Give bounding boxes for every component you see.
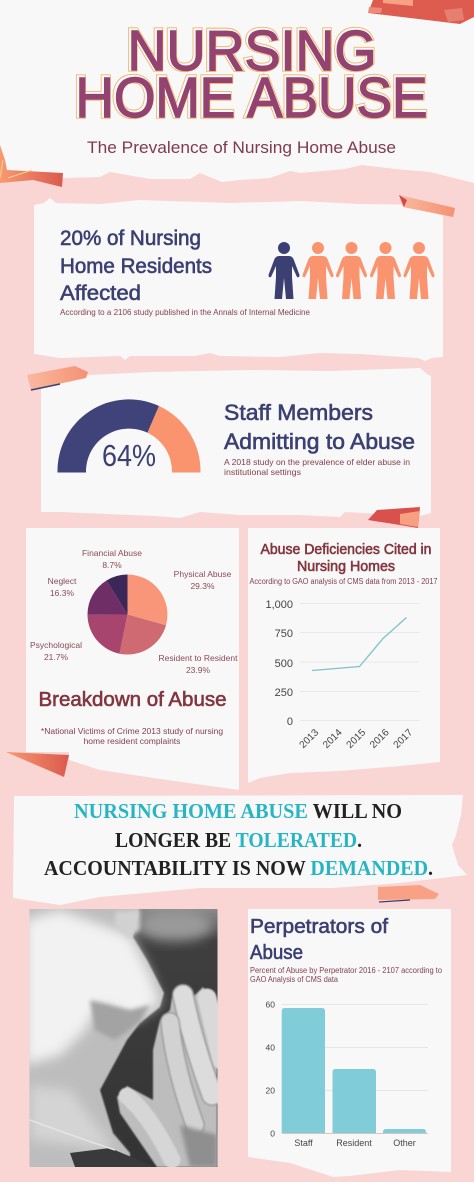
bar chart [266, 1000, 428, 1148]
heading: perpetrators: Perpetrators of [250, 916, 388, 938]
panel: perpetrators bar chart [248, 909, 451, 1177]
heading: deficiencies [260, 542, 432, 575]
pie labels: Resident to Resident [159, 653, 238, 663]
pie labels: Neglect [48, 576, 77, 586]
bar chart: Resident [336, 1138, 372, 1148]
title [74, 18, 428, 130]
pie labels: 23.9% [186, 665, 210, 675]
hand [117, 985, 222, 1167]
tape: top right [368, 0, 474, 24]
line chart: 1,000 [265, 599, 293, 611]
source note [224, 457, 410, 477]
line chart: 250 [275, 687, 293, 699]
line chart: 2016 [368, 727, 392, 751]
line chart: 2017 [392, 727, 415, 751]
pie chart [87, 574, 167, 654]
title: NURSING [126, 18, 376, 82]
source note: A 2018 study on the prevalence of elder abuse in [224, 457, 410, 467]
bar chart: Staff [294, 1138, 313, 1148]
pie labels: 29.3% [190, 581, 215, 591]
pie labels: Physical Abuse [174, 569, 232, 579]
line chart: 2014 [321, 727, 345, 751]
heading: breakdown: Breakdown of Abuse [38, 689, 226, 711]
tape: header left [0, 145, 63, 187]
banner statement: ACCOUNTABILITY IS NOW DEMANDED. [44, 856, 433, 880]
photo: elderly person praying [25, 905, 222, 1170]
tape: panel one corner [399, 195, 455, 217]
banner statement: NURSING HOME ABUSE WILL NO [74, 799, 402, 823]
title: HOME ABUSE [76, 66, 428, 130]
line chart: 500 [275, 658, 293, 670]
heading: perpetrators: Abuse [250, 942, 303, 964]
heading: staff members: Admitting to Abuse [224, 429, 415, 454]
line chart: 750 [275, 628, 293, 640]
panel: header [0, 0, 474, 183]
heading: staff members: Staff Members [224, 400, 373, 425]
heading: 20 percent: Affected [60, 282, 141, 305]
pie labels [30, 548, 238, 675]
title: HOME ABUSE [74, 65, 427, 129]
source note: According to GAO analysis of CMS data from 2013 - 2017 [250, 577, 438, 586]
heading: 20 percent [60, 227, 212, 305]
source note: *National Victims of Crime 2013 study of nursing [41, 726, 223, 736]
panel: 20 percent affected [34, 198, 443, 361]
source note: GAO Analysis of CMS data [250, 975, 338, 984]
title: HOME ABUSE [74, 65, 427, 129]
tape: breakdown corner [6, 752, 69, 777]
panel: banner [13, 795, 467, 905]
banner statement: LONGER BE TOLERATED. [115, 828, 362, 852]
line chart [265, 599, 419, 751]
pie labels: Psychological [30, 640, 82, 650]
source note: institutional settings [224, 467, 301, 477]
source note: Percent of Abuse by Perpetrator 2016 - 2107 according to [250, 966, 443, 975]
source note: home resident complaints [84, 736, 180, 746]
panel: deficiencies line chart [248, 528, 440, 783]
heading: deficiencies: Abuse Deficiencies Cited in [260, 542, 432, 558]
panel: staff admitting abuse [41, 368, 431, 518]
title: NURSING [126, 18, 376, 82]
source note [41, 726, 223, 746]
source note [250, 966, 443, 984]
line chart: 2015 [345, 727, 368, 751]
panel: breakdown of abuse [26, 528, 239, 790]
bar chart: Other [393, 1138, 416, 1148]
bar chart: 40 [266, 1042, 275, 1052]
heading: deficiencies: Nursing Homes [297, 559, 395, 575]
source note: According to a 2106 study published in the Annals of Internal Medicine [60, 308, 311, 317]
tape: banner corner [378, 885, 439, 902]
heading: 20 percent: Home Residents [60, 255, 212, 278]
bar chart: 0 [270, 1128, 275, 1138]
banner statement [44, 799, 433, 880]
tape: panel two right [368, 507, 420, 528]
pie labels: Financial Abuse [82, 548, 142, 558]
pie labels: 16.3% [50, 588, 74, 598]
icon: five people [268, 242, 434, 299]
gauge value: 64% [102, 438, 156, 473]
title: NURSING [128, 19, 376, 83]
line chart: 0 [287, 716, 293, 728]
line chart: 2013 [298, 727, 321, 751]
pie labels: 21.7% [44, 652, 68, 662]
heading: 20 percent: 20% of Nursing [60, 227, 201, 250]
bar chart: 60 [266, 1000, 275, 1010]
heading: perpetrators [250, 916, 388, 964]
bar chart: 20 [266, 1086, 275, 1096]
heading: staff members [224, 400, 415, 454]
tape: panel two left [27, 366, 88, 390]
gauge chart [57, 399, 201, 473]
subtitle: The Prevalence of Nursing Home Abuse [87, 138, 396, 157]
pie labels: 8.7% [102, 560, 122, 570]
